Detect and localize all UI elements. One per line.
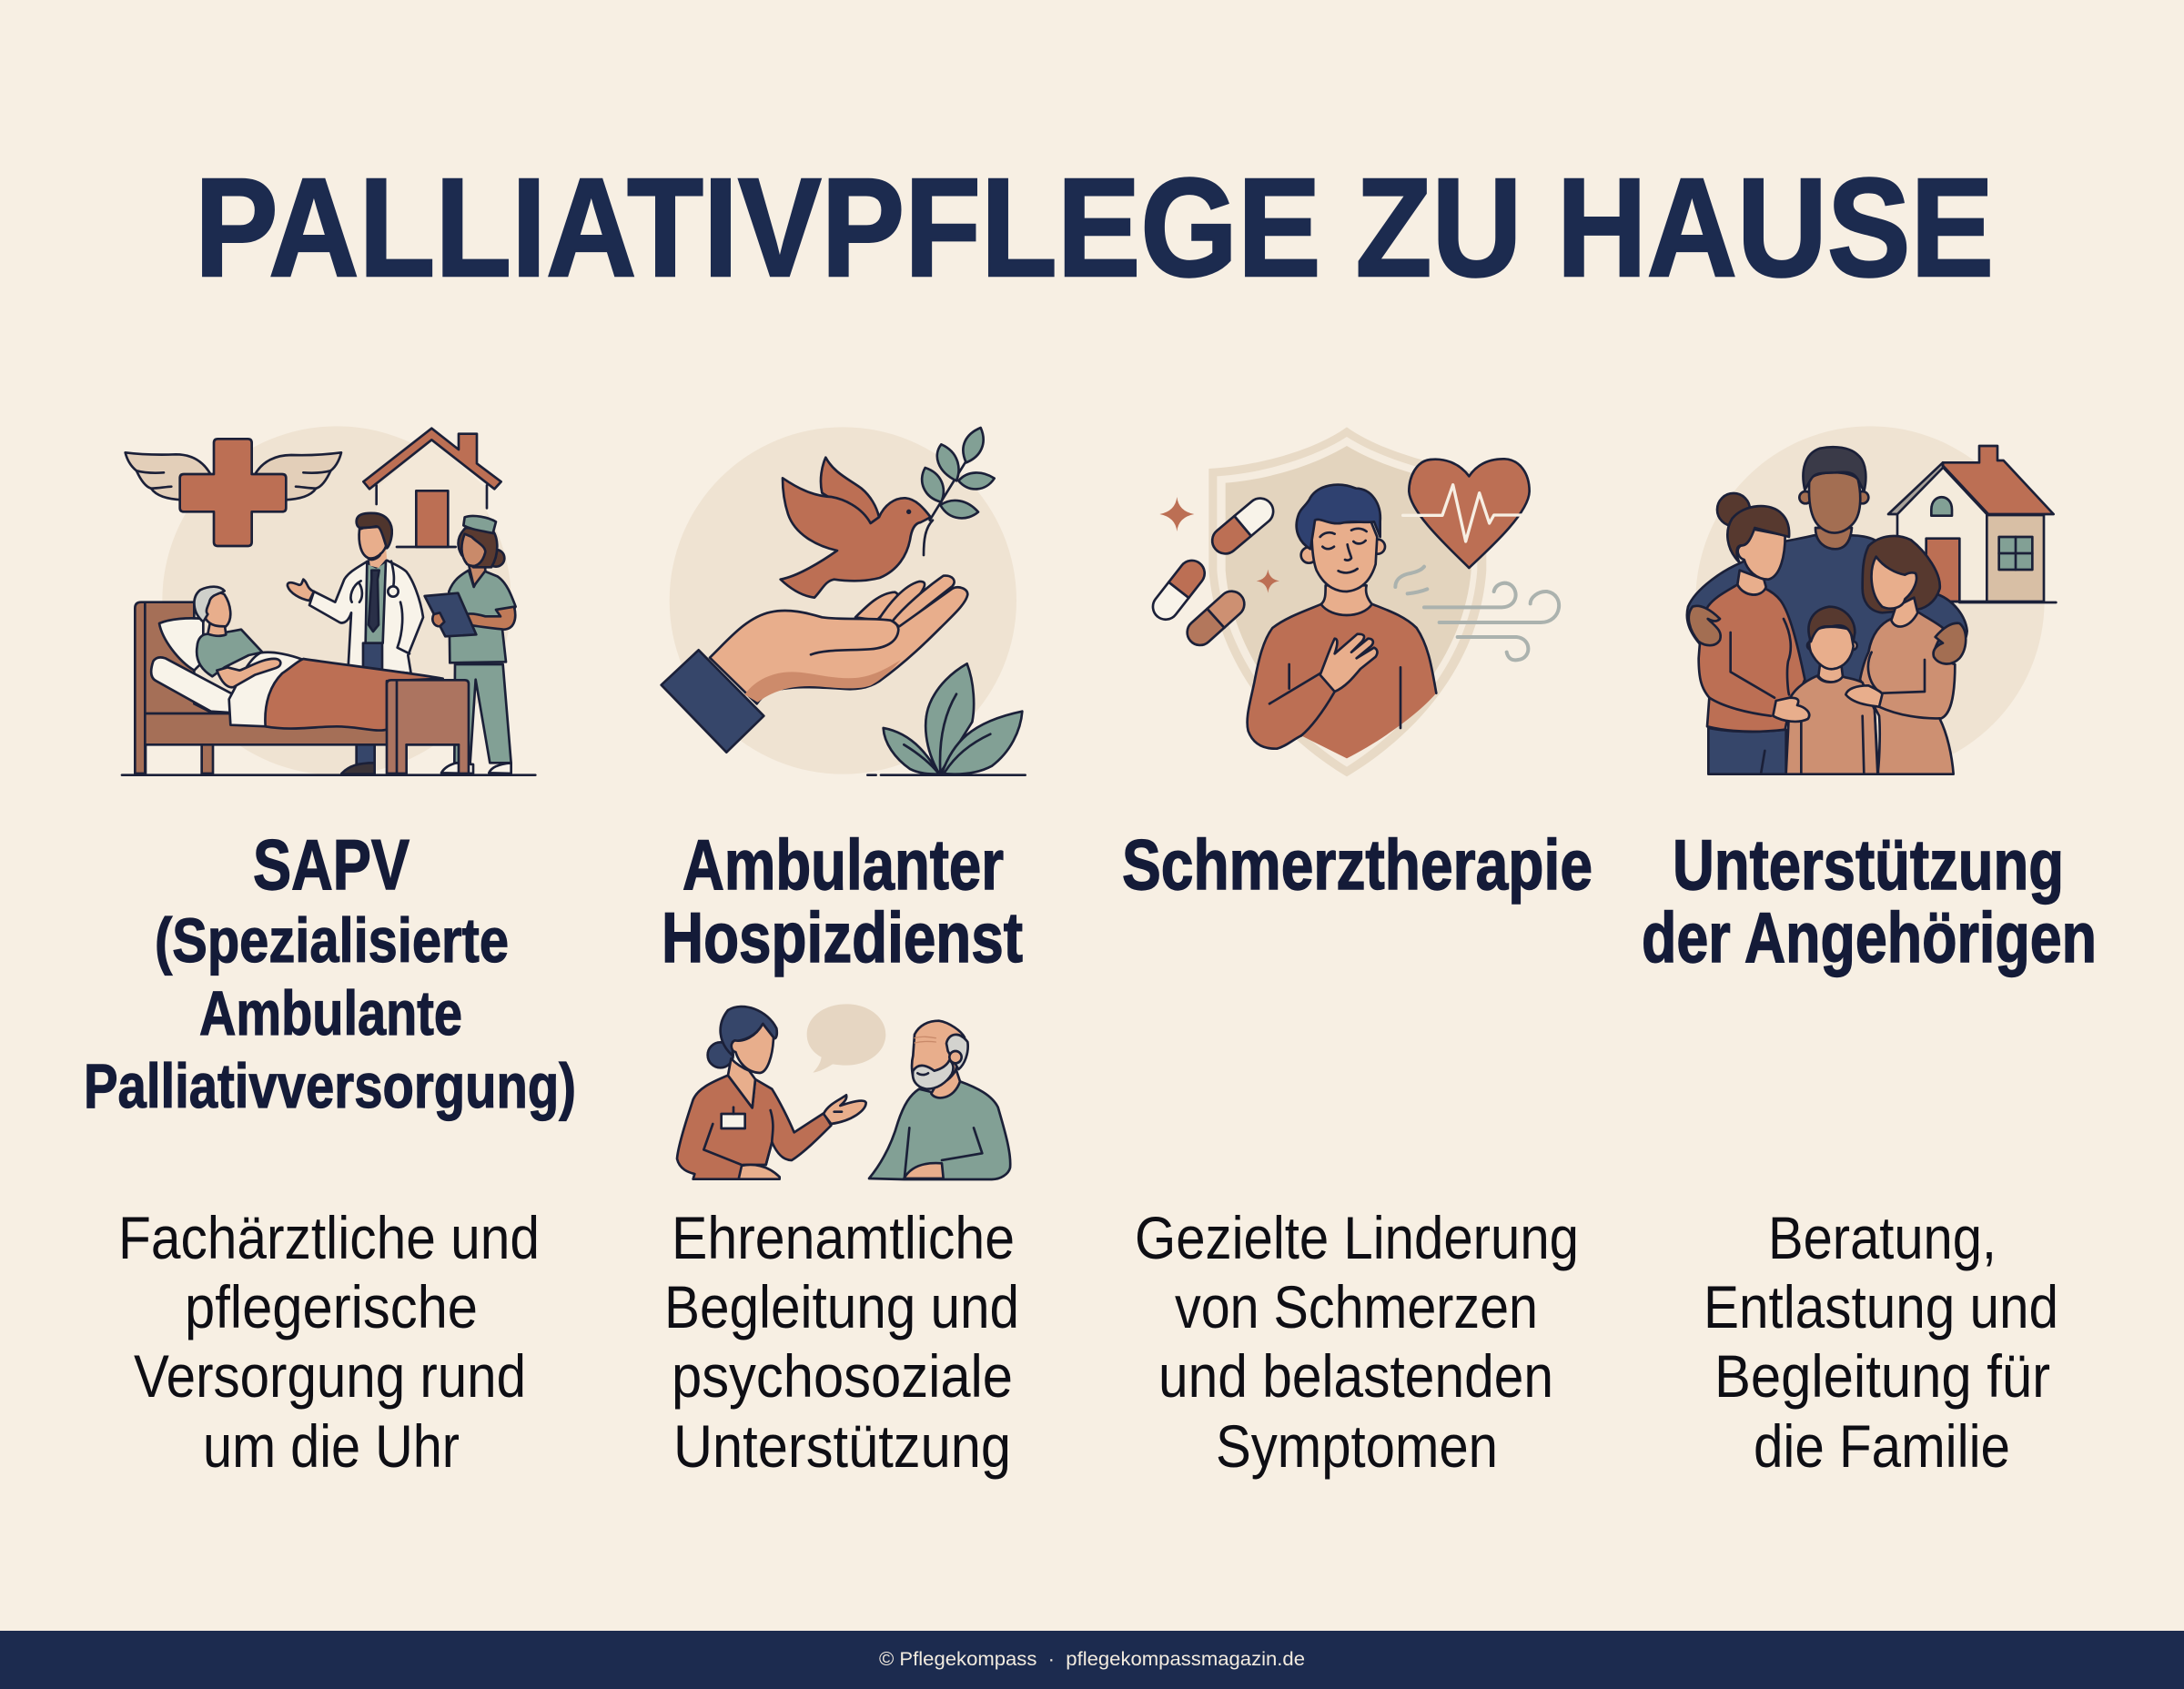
icon: family house bbox=[1888, 446, 2056, 602]
icon: mother right bbox=[1860, 536, 1966, 774]
description: Ambulanter Hospizdienst bbox=[664, 1204, 1019, 1480]
icon: wings bbox=[126, 452, 341, 500]
description: Unterstützung der Angehörigen: Entlastung und bbox=[1704, 1273, 2058, 1340]
icon: shield bbox=[1208, 427, 1486, 776]
heading: Ambulanter Hospizdienst: Ambulanter bbox=[682, 824, 1004, 905]
description: Schmerztherapie: und belastenden bbox=[1158, 1342, 1553, 1410]
heading: SAPV: (Spezialisierte bbox=[155, 905, 509, 976]
icon: plant bbox=[867, 663, 1026, 775]
icon: pills bbox=[1148, 493, 1279, 651]
description: Ambulanter Hospizdienst: psychosoziale bbox=[672, 1342, 1013, 1410]
heading: Schmerztherapie: Schmerztherapie bbox=[1122, 824, 1592, 905]
icon: doctor bbox=[288, 513, 423, 774]
icon: patient in bed bbox=[135, 587, 469, 774]
icon: elderly man bbox=[869, 1021, 1010, 1179]
icon: volunteer talking with elderly man bbox=[677, 1004, 1010, 1179]
footer band bbox=[0, 1631, 2184, 1689]
icon: speech bubble bbox=[807, 1004, 885, 1073]
description: Schmerztherapie bbox=[1135, 1204, 1579, 1480]
icon: hand releasing dove bbox=[662, 427, 1026, 775]
panel: Unterstützung der Angehörigen bbox=[1642, 426, 2097, 1480]
title: PALLIATIVPFLEGE ZU HAUSE bbox=[195, 149, 1994, 306]
heading: SAPV bbox=[84, 824, 576, 1121]
icon: mother left bbox=[1689, 493, 1805, 774]
icon: house bbox=[363, 429, 501, 547]
icon: medical cross bbox=[180, 439, 286, 546]
heading: SAPV: Ambulante bbox=[199, 978, 462, 1048]
icon: open hand bbox=[662, 576, 967, 753]
icon: person bbox=[1248, 485, 1436, 758]
heading: Ambulanter Hospizdienst: Hospizdienst bbox=[662, 897, 1023, 977]
icon: dove with olive branch bbox=[781, 428, 995, 598]
description: Schmerztherapie: Gezielte Linderung bbox=[1135, 1204, 1579, 1271]
icon: volunteer woman bbox=[677, 1006, 866, 1179]
panel: Schmerztherapie bbox=[1122, 427, 1592, 1480]
icon: heart with pulse line bbox=[1403, 459, 1530, 568]
description: SAPV: pflegerische bbox=[185, 1273, 478, 1340]
description: Unterstützung der Angehörigen: Beratung, bbox=[1768, 1204, 1997, 1271]
icon: calm person in shield with pills, heart and breath bbox=[1148, 427, 1559, 776]
panel: Ambulanter Hospizdienst bbox=[662, 427, 1026, 1480]
heading: SAPV: SAPV bbox=[253, 824, 410, 905]
footer band: © Pflegekompass · pflegekompassmagazin.de bbox=[879, 1649, 1305, 1670]
icon: family in front of house bbox=[1687, 426, 2056, 775]
icon: floor line bbox=[122, 772, 535, 779]
panel: SAPV bbox=[84, 426, 576, 1480]
icon: sparkles bbox=[1159, 497, 1279, 593]
description: SAPV: Versorgung rund bbox=[134, 1342, 526, 1410]
icon: nurse bbox=[425, 516, 516, 774]
description: SAPV: Fachärztliche und bbox=[118, 1204, 540, 1271]
description: Schmerztherapie: Symptomen bbox=[1216, 1412, 1498, 1480]
heading: Ambulanter Hospizdienst bbox=[662, 824, 1023, 977]
description: Schmerztherapie: von Schmerzen bbox=[1175, 1273, 1538, 1340]
heading: SAPV: Palliativversorgung) bbox=[84, 1051, 576, 1121]
description: Unterstützung der Angehörigen: Begleitung für bbox=[1714, 1342, 2050, 1410]
icon: breath waves bbox=[1395, 567, 1559, 660]
description: Ambulanter Hospizdienst: Begleitung und bbox=[664, 1273, 1019, 1340]
description: Ambulanter Hospizdienst: Ehrenamtliche bbox=[672, 1204, 1015, 1271]
description: Unterstützung der Angehörigen bbox=[1704, 1204, 2058, 1480]
icon: care team at bedside with winged cross and house bbox=[122, 426, 535, 775]
heading: Unterstützung der Angehörigen: Unterstützung bbox=[1673, 824, 2064, 905]
description: Unterstützung der Angehörigen: die Familie bbox=[1754, 1412, 2010, 1480]
heading: Unterstützung der Angehörigen bbox=[1642, 824, 2097, 977]
icon: father bbox=[1687, 447, 1967, 683]
icon: child bbox=[1773, 607, 1882, 774]
description: SAPV bbox=[118, 1204, 540, 1480]
description: SAPV: um die Uhr bbox=[203, 1412, 460, 1480]
description: Ambulanter Hospizdienst: Unterstützung bbox=[673, 1412, 1011, 1480]
